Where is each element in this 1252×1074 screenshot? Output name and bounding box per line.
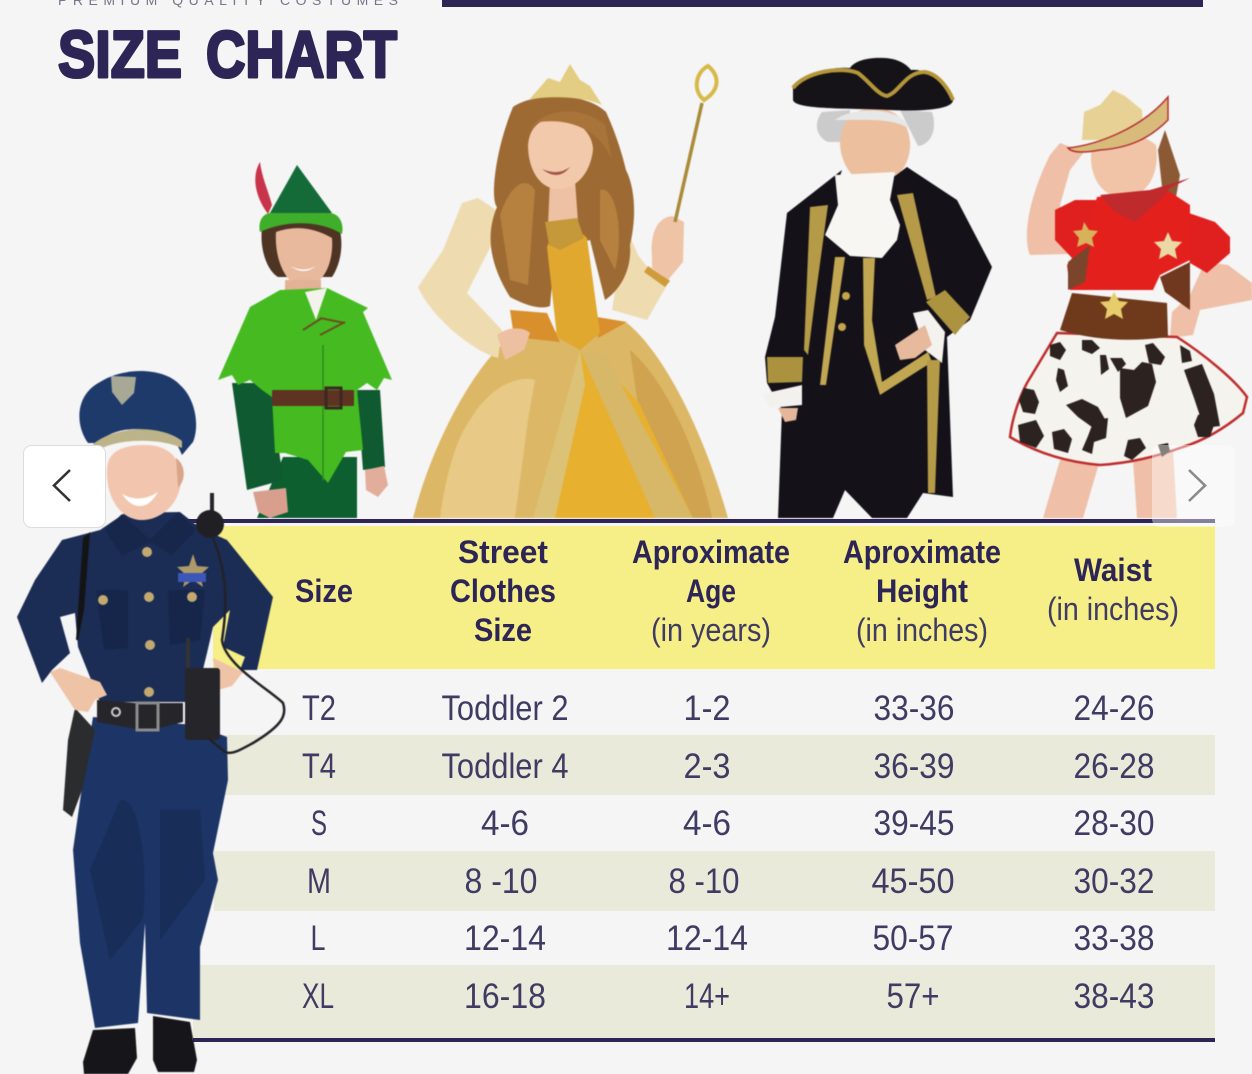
row L: L bbox=[310, 919, 326, 958]
row S: S bbox=[311, 804, 327, 843]
size table bbox=[185, 519, 1215, 1042]
header: street clothes size bbox=[450, 534, 556, 648]
row T4: 2-3 bbox=[684, 747, 730, 786]
header: street clothes size: Street bbox=[458, 534, 548, 570]
row T4: T4 bbox=[302, 747, 336, 786]
row L: 12-14 bbox=[464, 919, 546, 958]
header: approximate height bbox=[843, 534, 1001, 648]
row S: 39-45 bbox=[874, 804, 954, 843]
header: waist bbox=[1047, 552, 1179, 627]
figure: princess in gold gown bbox=[413, 64, 728, 518]
header: approximate height: Aproximate bbox=[843, 534, 1001, 570]
figure: green archer costume child bbox=[218, 162, 392, 518]
row T2: 1-2 bbox=[684, 689, 730, 728]
row L bbox=[310, 919, 1154, 958]
row M: 45-50 bbox=[872, 862, 954, 901]
row M: 30-32 bbox=[1074, 862, 1154, 901]
row T4: Toddler 4 bbox=[442, 747, 568, 786]
row L: 33-38 bbox=[1074, 919, 1154, 958]
figure: colonial coat child bbox=[762, 58, 992, 518]
figure: police officer child bbox=[17, 371, 284, 1074]
row XL bbox=[302, 977, 1154, 1016]
title: SIZE bbox=[58, 17, 182, 91]
right chevron bbox=[1189, 470, 1205, 501]
row XL: 38-43 bbox=[1074, 977, 1154, 1016]
row S: 28-30 bbox=[1074, 804, 1154, 843]
header: approximate age: Aproximate bbox=[632, 534, 790, 570]
row T2: 24-26 bbox=[1074, 689, 1154, 728]
row S: 4-6 bbox=[683, 804, 731, 843]
header: waist: (in inches) bbox=[1047, 591, 1179, 627]
header: street clothes size: Clothes bbox=[450, 573, 556, 609]
row L: 50-57 bbox=[872, 919, 954, 958]
title bbox=[58, 17, 397, 91]
table bottom rule bbox=[193, 1038, 1215, 1042]
row XL: 57+ bbox=[886, 977, 940, 1016]
row T2 bbox=[302, 689, 1154, 728]
header: approximate age bbox=[632, 534, 790, 648]
title: CHART bbox=[206, 17, 397, 91]
row L: 12-14 bbox=[666, 919, 748, 958]
row M: 8 -10 bbox=[464, 862, 538, 901]
row T2: 33-36 bbox=[874, 689, 954, 728]
table header background bbox=[213, 526, 1215, 669]
row S: 4-6 bbox=[481, 804, 529, 843]
row XL: 14+ bbox=[684, 977, 730, 1016]
row M: M bbox=[307, 862, 331, 901]
row XL: XL bbox=[302, 977, 334, 1016]
row T2: T2 bbox=[302, 689, 336, 728]
row XL: 16-18 bbox=[464, 977, 546, 1016]
left chevron bbox=[54, 470, 70, 501]
row T4: 36-39 bbox=[874, 747, 954, 786]
header: size: Size bbox=[295, 573, 353, 609]
row band XL bbox=[193, 965, 1215, 1038]
top bar bbox=[442, 0, 1203, 7]
right carousel button bbox=[1152, 445, 1235, 527]
left carousel button bbox=[24, 446, 106, 528]
header: street clothes size: Size bbox=[474, 612, 532, 648]
row M bbox=[307, 862, 1154, 901]
header: approximate age: Age bbox=[686, 573, 736, 609]
row M: 8 -10 bbox=[668, 862, 740, 901]
row T4 bbox=[302, 747, 1154, 786]
header: approximate height: Height bbox=[876, 573, 968, 609]
header: waist: Waist bbox=[1074, 552, 1152, 588]
row T4: 26-28 bbox=[1074, 747, 1154, 786]
header: approximate age: (in years) bbox=[651, 612, 771, 648]
row band T4 bbox=[220, 735, 1215, 795]
table top rule bbox=[185, 519, 1215, 523]
header: approximate height: (in inches) bbox=[856, 612, 988, 648]
row S bbox=[311, 804, 1154, 843]
row band M bbox=[214, 851, 1215, 911]
row T2: Toddler 2 bbox=[442, 689, 568, 728]
figure: cowgirl child bbox=[1010, 90, 1252, 518]
